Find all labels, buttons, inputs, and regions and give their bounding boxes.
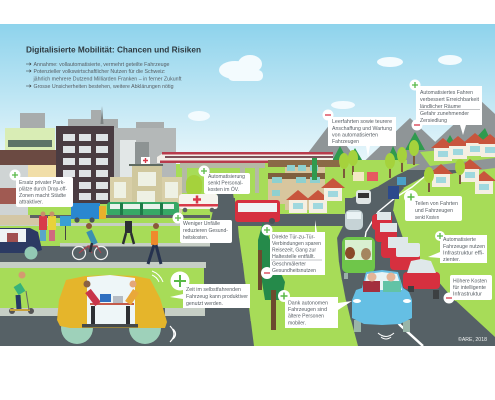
callout: door to door: Haltestelle entfällt.: [272, 254, 315, 260]
callout: infrastructure efficiency: Infrastruktur effi-: [443, 250, 484, 256]
callout: staff costs: senkt Personal-: [208, 180, 243, 186]
small houses: [286, 133, 495, 213]
red train: [157, 152, 333, 163]
callout: door to door: [261, 220, 325, 279]
intro bullet list: Potenzieller volkswirtschaftlicher Nutzen für die Schweiz:: [34, 69, 166, 75]
row houses: [255, 158, 340, 210]
sky background: [0, 24, 495, 164]
callout: fewer accidents: [172, 212, 232, 243]
cyclist: [72, 223, 108, 260]
callout: staff costs: kosten im ÖV.: [208, 186, 239, 193]
callout: empty trips: Anschaffung und Wartung: [332, 126, 392, 132]
red car queue: [372, 212, 440, 299]
callout: rural access: Gefahr zunehmender: [420, 111, 469, 117]
callout: productive time: genutzt werden.: [186, 301, 223, 307]
large foreground trees: [258, 222, 285, 330]
callout: staff costs: [198, 166, 250, 194]
ground: right of the country road: [393, 145, 495, 337]
elevated train viaduct: [180, 163, 265, 193]
callout: fewer accidents: reduzieren Gesund-: [183, 228, 228, 234]
callout: higher costs: Höhere Kosten: [453, 278, 487, 284]
callout: fewer accidents: heitskosten.: [183, 235, 208, 241]
callout: higher costs: Infrastruktur: [453, 292, 482, 298]
callout: infrastructure efficiency: zienter.: [443, 257, 460, 263]
callout: infrastructure efficiency: Automatisierte: [443, 237, 476, 243]
landscape trees: [339, 140, 465, 192]
callout: empty trips: Leerfahrten sowie teurere: [332, 119, 392, 125]
callout: higher costs: für intelligente: [453, 285, 486, 291]
beige station building: [110, 157, 182, 213]
callout: drop-off zones: Zonen macht Städte: [19, 193, 66, 199]
wifi signals: [152, 271, 394, 342]
pavement strips: [0, 223, 210, 246]
callout: drop-off zones: [10, 170, 73, 207]
callout: door to door: Geschmälerter: [272, 262, 306, 268]
city buildings: [0, 106, 176, 225]
intro bullet list: Grosse Unsicherheiten bestehen, weitere Abklärungen nötig: [34, 84, 174, 90]
dark apartment block: [56, 126, 114, 204]
scooter rider: [9, 272, 34, 314]
red bus: [235, 200, 280, 224]
intro bullet list: jährlich mehrere Dutzend Milliarden Franken – in ferner Zukunft: [32, 76, 182, 82]
callout: door to door: Reisezeit, Gang zur: [272, 248, 316, 254]
pine forest: [330, 128, 495, 165]
pavements: [0, 262, 206, 316]
callout: empty trips: [322, 110, 396, 157]
mountain: right peak: [405, 100, 495, 170]
parked cars: [353, 172, 378, 181]
callout: infrastructure efficiency: [428, 231, 487, 263]
title: Digitalisierte Mobilität: Chancen und Risiken: [26, 44, 201, 54]
callout: infrastructure efficiency: Fahrzeuge nutzen: [443, 244, 485, 250]
green car with dogs: [342, 237, 375, 279]
callout: sharing: [404, 190, 462, 221]
minibus far on road: [356, 177, 406, 204]
green trees in the city: [186, 175, 202, 197]
callout: rural access: Zersiedlung: [420, 118, 447, 124]
callout: older people: mobiler.: [288, 320, 306, 326]
yellow autonomous pod: [57, 275, 167, 344]
callout: rural access: [410, 80, 482, 135]
callout: productive time: Zeit im selbstfahrenden: [186, 287, 241, 293]
callout: door to door: Verbindungen sparen: [272, 241, 321, 247]
callout: rural access: verbessert Erreichbarkeit: [420, 97, 480, 103]
green strips: [0, 226, 204, 308]
bus stop sign: [60, 216, 71, 240]
intro bullet list: [26, 62, 182, 90]
tram rail: [30, 215, 210, 218]
top margin: [0, 0, 495, 24]
callout: productive time: Fahrzeug kann produktiver: [186, 294, 248, 300]
callout: fewer accidents: Weniger Unfälle: [183, 221, 220, 227]
callout: older people: [278, 290, 352, 328]
green tram: [107, 202, 179, 216]
blue shuttle: [0, 228, 42, 260]
callout: sharing: und Fahrzeugen: [415, 208, 453, 214]
pedestrian in orange: [148, 223, 161, 264]
callout: drop-off zones: plätze durch Drop-off-: [19, 186, 67, 192]
copyright: ©ARE, 2018: [458, 336, 487, 343]
callout: empty trips: von automatisierten: [332, 132, 378, 138]
mountain: centre peak: [355, 118, 465, 170]
road surface: [0, 164, 495, 346]
callout: door to door: Gesundheitsnutzen: [272, 268, 316, 274]
callout: productive time: [170, 272, 250, 308]
callout: drop-off zones: attraktiver.: [19, 200, 43, 206]
callout: rural access: ländlicher Räume: [420, 104, 461, 110]
intro bullet list: Annahme: vollautomatisierte, vermehrt geteilte Fahrzeuge: [34, 62, 170, 68]
callout: sharing: Teilen von Fahrten: [415, 201, 458, 207]
callout: door to door: Direkte Tür-zu-Tür-: [272, 234, 315, 240]
mountain: left peak: [295, 124, 365, 170]
callout: older people: ältere Personen: [288, 314, 324, 320]
blue car with seniors: [352, 270, 412, 332]
callout: older people: Fahrzeugen sind: [288, 307, 327, 313]
clouds: [188, 55, 462, 121]
callout: higher costs: [444, 275, 492, 304]
callout: drop-off zones: Ersatz privater Park-: [19, 180, 65, 186]
callout: rural access: Automatisiertes Fahren: [420, 90, 473, 96]
callout: staff costs: Automatisierung: [208, 174, 245, 180]
pedestrian in black: [123, 221, 134, 244]
people at the stop: [39, 212, 56, 241]
callout: sharing: senkt Kosten: [415, 215, 439, 221]
blue truck: [71, 203, 106, 223]
road markings: [363, 172, 430, 346]
silver car: [345, 210, 363, 230]
callout: older people: Dank autonomen: [288, 300, 328, 306]
ambulance: [179, 194, 218, 212]
ground: left of the country road: [0, 160, 420, 346]
bottom margin: [0, 346, 495, 400]
callout: empty trips: Fahrzeugen: [332, 139, 359, 145]
